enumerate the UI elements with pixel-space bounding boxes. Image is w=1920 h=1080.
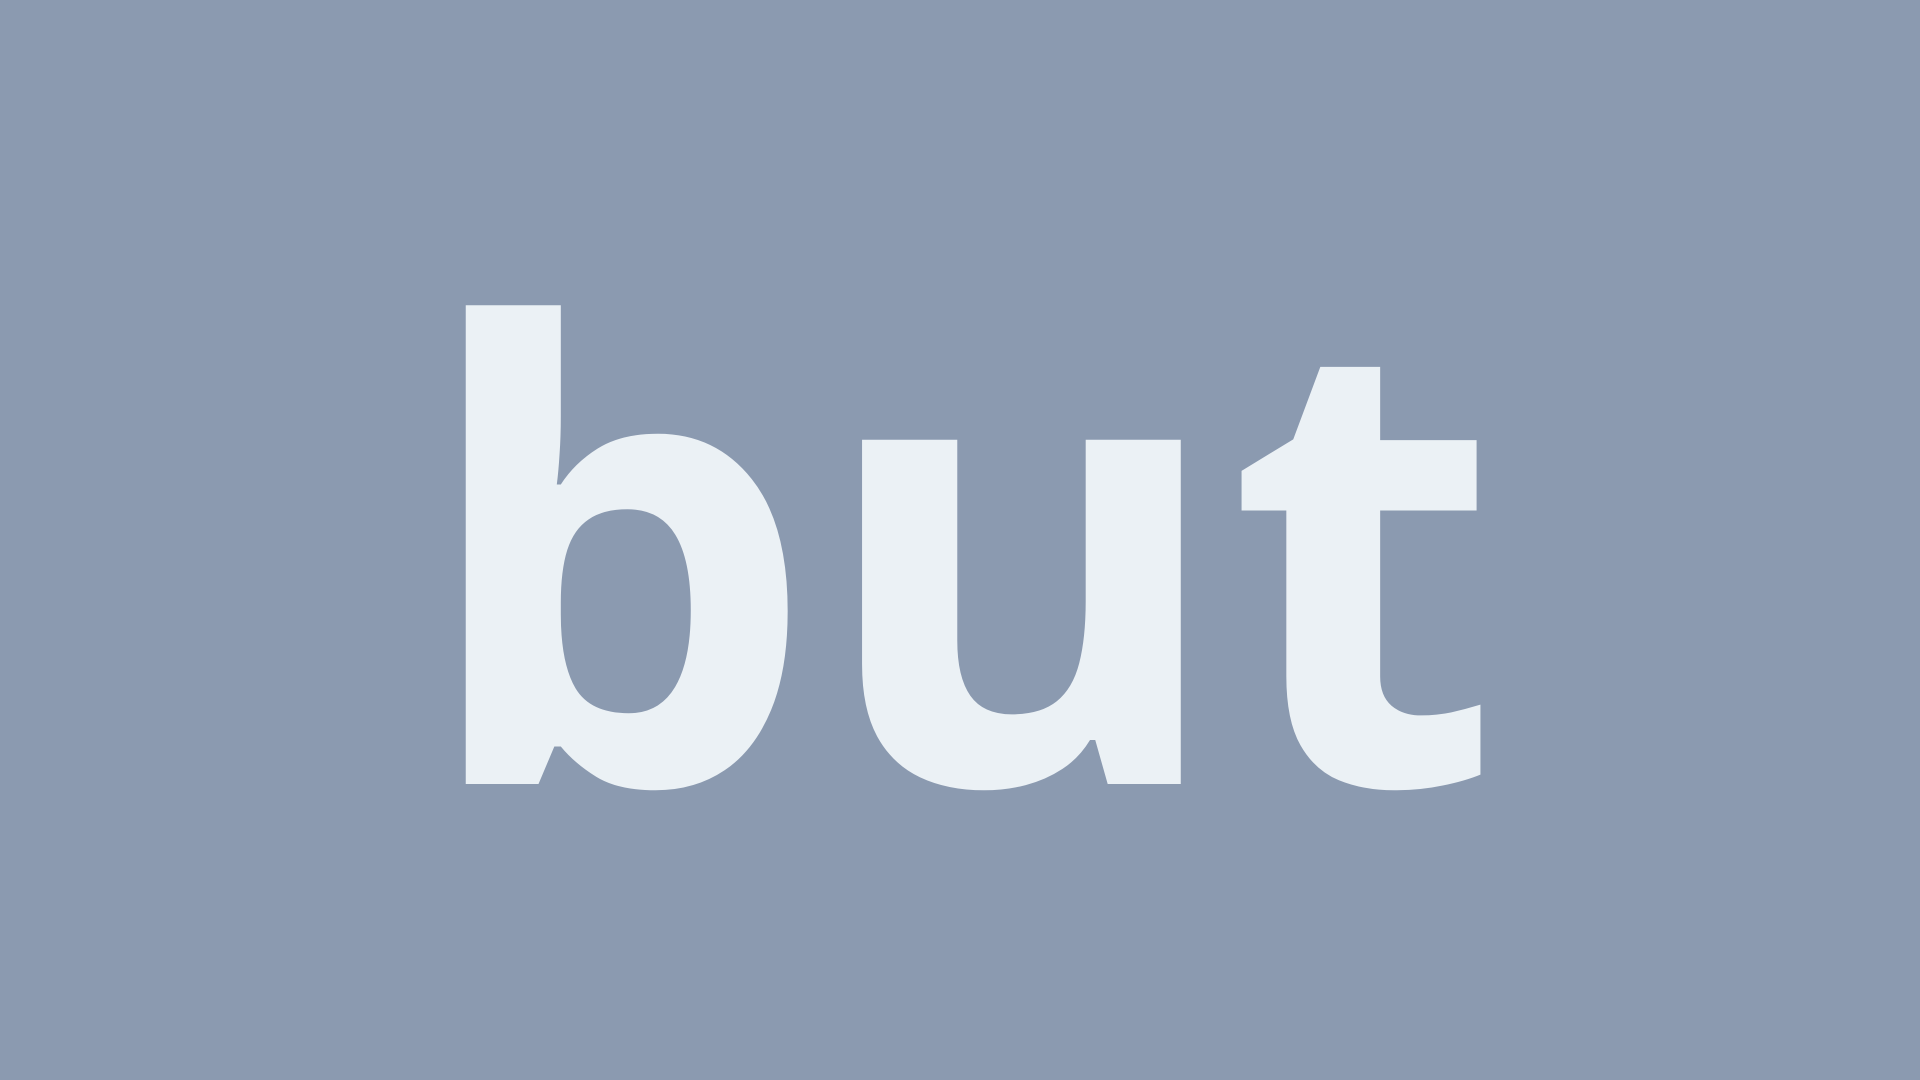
title word: but: but	[419, 111, 1501, 969]
